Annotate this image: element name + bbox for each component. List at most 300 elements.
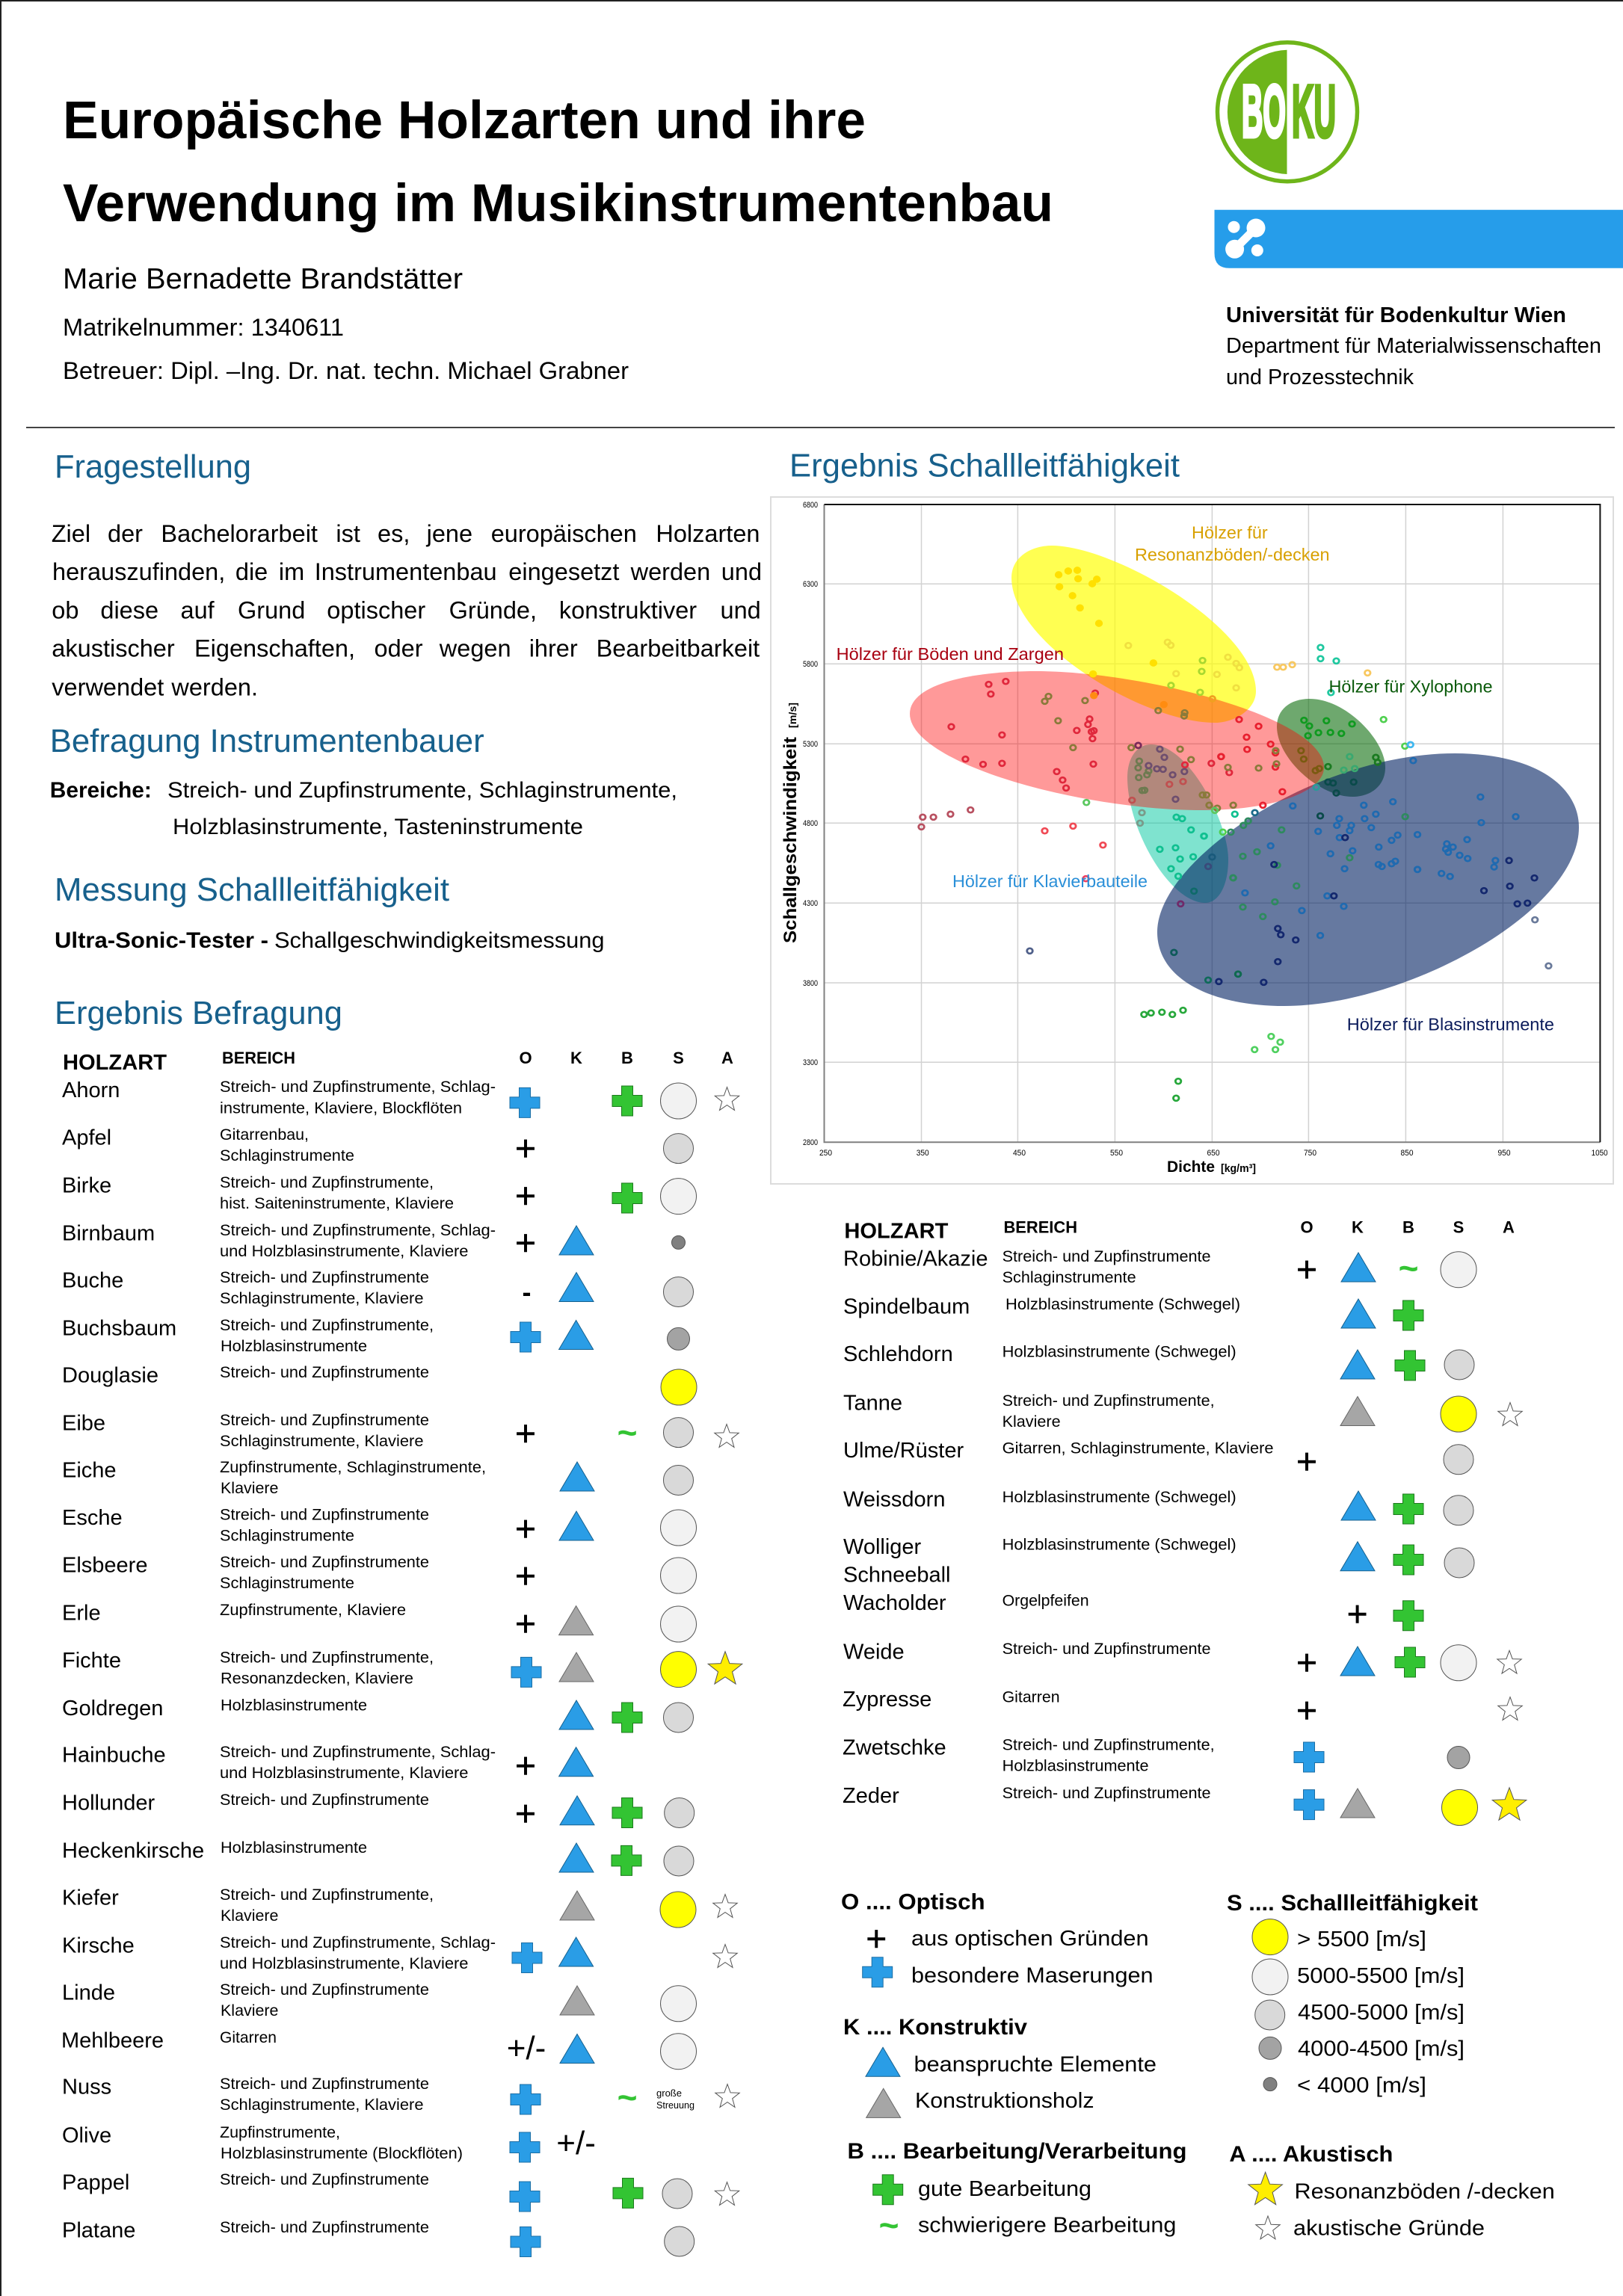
title: Europäische Holzarten und ihre: [63, 91, 866, 150]
row: Tanne: Klaviere: [1003, 1413, 1061, 1431]
legend item: schwierigere Bearbeitung: [918, 2214, 1176, 2238]
row: Weide: +: [1296, 1644, 1317, 1683]
table header: S: [1453, 1218, 1464, 1236]
icon: yellow star: [1248, 2172, 1282, 2205]
x axis tick labels: 1050: [1592, 1149, 1608, 1158]
legend heading: O .... Optisch: [841, 1889, 985, 1914]
region: Xylophone ellipse: [1277, 699, 1385, 797]
row: Birnbaum: und Holzblasinstrumente, Klaviere: [220, 1242, 468, 1260]
x axis tick labels: 450: [1013, 1149, 1026, 1158]
legend item: < 4000 [m/s]: [1297, 2074, 1426, 2098]
row: Pappel: Streich- und Zupfinstrumente: [220, 2170, 429, 2188]
row: Elsbeere: Elsbeere: [62, 1553, 147, 1577]
row: Ahorn: Ahorn: [62, 1078, 120, 1102]
row: Buchsbaum: Holzblasinstrumente: [221, 1337, 367, 1355]
table header: BEREICH: [222, 1049, 295, 1067]
row: Wacholder: Orgelpfeifen: [1003, 1592, 1089, 1610]
row: Wolliger Schneeball: [843, 1535, 1474, 1587]
heading: Befragung Instrumentenbauer: Befragung Instrumentenbauer: [50, 723, 484, 759]
legend heading: B .... Bearbeitung/Verarbeitung: [848, 2139, 1187, 2164]
row: Hainbuche: Hainbuche: [62, 1743, 166, 1767]
data points: upper right chart area: [1201, 645, 1518, 872]
heading: Ergebnis Befragung: Ergebnis Befragung: [55, 995, 342, 1031]
row: Buche: Schlaginstrumente, Klaviere: [220, 1289, 423, 1307]
icon: blue cross: [863, 1957, 893, 1987]
matriculation number: Matrikelnummer: 1340611: [63, 314, 344, 341]
legend: K Konstruktiv: [843, 2015, 1157, 2117]
row: Erle: +: [515, 1605, 536, 1644]
label: Hölzer für Resonanzböden/-decken: Hölzer für: [1192, 523, 1268, 543]
row: Zwetschke: [843, 1735, 1470, 1775]
legend item: Resonanzböden /-decken: [1295, 2179, 1555, 2203]
y axis tick labels: 3800: [803, 979, 818, 988]
row: Wacholder: Wacholder: [843, 1591, 946, 1615]
row: Kiefer: [62, 1886, 737, 1928]
table header: S: [673, 1049, 684, 1067]
row: Zeder: Streich- und Zupfinstrumente: [1003, 1784, 1211, 1802]
legend item: 4000-4500 [m/s]: [1298, 2037, 1465, 2061]
row: Heckenkirsche: [62, 1839, 694, 1876]
icon: smallest circle: [1263, 2078, 1277, 2091]
text block: research question: optischer: [327, 596, 425, 623]
legend: B Bearbeitung: [848, 2139, 1187, 2244]
row: Kirsche: Streich- und Zupfinstrumente, Schlag-: [220, 1934, 496, 1951]
legend item: gute Bearbeitung: [918, 2177, 1091, 2201]
y axis tick labels: 6800: [803, 501, 818, 510]
row: Zeder: [843, 1784, 1527, 1825]
legend heading: K .... Konstruktiv: [843, 2015, 1027, 2040]
row: Eibe: Schlaginstrumente, Klaviere: [220, 1432, 423, 1450]
row: Apfel: Schlaginstrumente: [220, 1147, 354, 1164]
legend heading: A .... Akustisch: [1229, 2142, 1393, 2167]
row: Hainbuche: [62, 1743, 594, 1786]
row: Platane: Streich- und Zupfinstrumente: [220, 2218, 429, 2236]
text block: research question: Eigenschaften,: [194, 635, 355, 662]
row: Fichte: Resonanzdecken, Klaviere: [221, 1670, 413, 1688]
label: Hölzer für Xylophone: Hölzer für Xylophone: [1329, 677, 1492, 697]
title: [63, 91, 1053, 233]
row: Weide: [843, 1640, 1521, 1683]
icon: green cross: [873, 2175, 903, 2205]
row: Erle: Zupfinstrumente, Klaviere: [220, 1601, 406, 1619]
icon: grey triangle: [866, 2088, 901, 2117]
row: Ahorn: [62, 1078, 739, 1119]
row: Platane: [62, 2218, 695, 2257]
row: Buchsbaum: Streich- und Zupfinstrumente,: [220, 1316, 434, 1334]
x axis tick labels: 550: [1110, 1149, 1123, 1158]
department: und Prozesstechnik: [1226, 365, 1414, 389]
text block: research question: konstruktiver: [559, 596, 697, 623]
row: Ahorn: Streich- und Zupfinstrumente, Schlag-: [220, 1078, 496, 1096]
row: Hainbuche: +: [515, 1747, 536, 1786]
row: Esche: Esche: [62, 1506, 123, 1530]
row: Apfel: Gitarrenbau,: [220, 1126, 309, 1144]
row: Olive: [62, 2123, 596, 2162]
text block: research question: Bearbeitbarkeit: [597, 635, 760, 662]
author: Marie Bernadette Brandstätter: [63, 263, 463, 295]
row: Elsbeere: Schlaginstrumente: [220, 1574, 354, 1592]
x axis tick labels: 350: [917, 1149, 929, 1158]
legend item: beanspruchte Elemente: [914, 2052, 1157, 2076]
text block: research question: Instrumentenbau: [315, 558, 497, 585]
row: Wolliger Schneeball: Schneeball: [843, 1564, 951, 1587]
region: Böden und Zargen ellipse: [910, 671, 1324, 810]
row: Nuss: Streich- und Zupfinstrumente: [220, 2075, 429, 2093]
row: Kirsche: Kirsche: [62, 1934, 135, 1958]
text block: research question: europäischen: [491, 520, 637, 547]
row: Ulme/Rüster: [843, 1439, 1473, 1482]
row: Buchsbaum: [62, 1316, 689, 1355]
table header: HOLZART: [63, 1051, 167, 1075]
text block: research question: akustischer: [52, 635, 175, 662]
department: [1226, 334, 1601, 389]
row: Nuss: große: [656, 2087, 682, 2099]
row: Robinie/Akazie: ~: [1399, 1249, 1418, 1288]
row: Eiche: Zupfinstrumente, Schlaginstrumente,: [220, 1458, 486, 1476]
row: Linde: [62, 1981, 697, 2022]
text block: Bereiche: [50, 778, 677, 839]
row: Hainbuche: Streich- und Zupfinstrumente, Schlag-: [220, 1743, 496, 1761]
row: Esche: +: [515, 1510, 536, 1549]
row: Birke: +: [515, 1176, 536, 1217]
table header: A: [721, 1049, 733, 1067]
row: Zypresse: [843, 1688, 1522, 1731]
region: Blasinstrumente ellipse: [1157, 753, 1579, 1006]
row: Eibe: +: [515, 1415, 536, 1454]
row: Douglasie: Douglasie: [62, 1363, 158, 1387]
label: Hölzer für Klavierbauteile: Hölzer für Klavierbauteile: [952, 871, 1148, 891]
x axis tick labels: 750: [1304, 1149, 1316, 1158]
row: Buche: Buche: [62, 1269, 123, 1293]
row: Wacholder: +: [1347, 1595, 1368, 1635]
row: Linde: Linde: [62, 1981, 115, 2005]
text block: Bereiche: Holzblasinstrumente, Tasteninstrumente: [173, 815, 583, 839]
icon: green tilde: ~: [879, 2206, 899, 2244]
row: Buche: Streich- und Zupfinstrumente: [220, 1268, 429, 1286]
row: Zypresse: Zypresse: [843, 1688, 931, 1712]
text block: research question: diese: [100, 596, 158, 623]
university name: Universität für Bodenkultur Wien: [1226, 303, 1566, 327]
row: Elsbeere: Streich- und Zupfinstrumente: [220, 1553, 429, 1571]
row: Weissdorn: [843, 1487, 1473, 1525]
row: Esche: Schlaginstrumente: [220, 1526, 354, 1544]
title: Verwendung im Musikinstrumentenbau: [63, 174, 1053, 233]
row: Nuss: Streuung: [656, 2099, 695, 2111]
row: Mehlbeere: +/-: [507, 2030, 546, 2067]
row: Erle: Erle: [62, 1601, 101, 1625]
header: title and author: [63, 91, 1053, 384]
row: Pappel: Pappel: [62, 2170, 129, 2194]
text block: research question: werden: [630, 558, 710, 585]
icon: blue triangle: [866, 2047, 900, 2076]
row: Eiche: [62, 1458, 694, 1497]
x axis title: Dichte: [1167, 1158, 1215, 1176]
row: Tanne: [843, 1392, 1522, 1432]
row: Tanne: Streich- und Zupfinstrumente,: [1003, 1392, 1215, 1410]
row: Mehlbeere: Mehlbeere: [61, 2028, 164, 2052]
row: Douglasie: Streich- und Zupfinstrumente: [220, 1363, 429, 1381]
row: Eiche: Eiche: [62, 1459, 117, 1483]
table header: B: [621, 1049, 633, 1067]
text block: research question: [52, 520, 762, 700]
legend item: besondere Maserungen: [911, 1964, 1154, 1988]
data points: lower right chart area: [1231, 867, 1551, 1052]
text block: research question: herauszufinden,: [52, 558, 225, 585]
label: Hölzer für Resonanzböden/-decken: [1135, 523, 1330, 564]
data points: lower left chart area: [1027, 854, 1241, 1101]
row: Olive: Olive: [62, 2124, 111, 2148]
legend item: akustische Gründe: [1293, 2216, 1485, 2240]
row: Linde: Streich- und Zupfinstrumente: [220, 1981, 429, 1999]
row: Hollunder: +: [515, 1794, 536, 1834]
text block: research question: ihrer: [529, 635, 578, 662]
row: Esche: [62, 1505, 697, 1549]
x axis tick labels: 950: [1498, 1149, 1510, 1158]
row: Erle: [62, 1601, 697, 1644]
row: Robinie/Akazie: Streich- und Zupfinstrumente: [1003, 1247, 1211, 1265]
chart: sound velocity vs density scatter: [771, 497, 1613, 1184]
row: Hollunder: [62, 1791, 695, 1834]
row: Olive: Zupfinstrumente,: [220, 2123, 340, 2141]
legend: S Schallleitfähigkeit: [1227, 1891, 1478, 2098]
row: Heckenkirsche: Heckenkirsche: [62, 1839, 204, 1863]
row: Kiefer: Kiefer: [62, 1886, 119, 1910]
supervisor: Betreuer: Dipl. –Ing. Dr. nat. techn. Michael Grabner: [63, 357, 629, 384]
icon: outline star: [1256, 2216, 1280, 2239]
text block: measurement method: Schallgeschwindigkeitsmessung: [274, 928, 604, 953]
legend heading: S .... Schallleitfähigkeit: [1227, 1891, 1478, 1916]
legend item: 4500-5000 [m/s]: [1298, 2001, 1465, 2025]
table header: B: [1402, 1218, 1414, 1236]
heading: Fragestellung: Fragestellung: [55, 448, 251, 485]
legend item: > 5500 [m/s]: [1297, 1928, 1426, 1951]
legend: A Akustisch: [1229, 2142, 1555, 2240]
row: Apfel: [62, 1126, 694, 1169]
row: Elsbeere: +: [515, 1557, 536, 1596]
department: Department für Materialwissenschaften: [1226, 334, 1601, 358]
row: Mehlbeere: Gitarren: [220, 2028, 277, 2046]
text block: research question: es,: [378, 520, 410, 547]
text block: research question: Bachelorarbeit: [161, 520, 318, 547]
table: left wood species: [61, 1049, 742, 2257]
row: Fichte: [62, 1649, 742, 1688]
row: Zypresse: Gitarren: [1003, 1688, 1060, 1706]
row: Nuss: [62, 2075, 739, 2117]
icon: grey circle: [1255, 2000, 1285, 2030]
row: Buchsbaum: Buchsbaum: [62, 1317, 176, 1341]
text block: measurement method: Ultra-Sonic-Tester -: [55, 928, 268, 953]
row: Platane: Platane: [62, 2218, 135, 2242]
y axis tick labels: 3300: [803, 1058, 818, 1067]
icon: black plus: +: [866, 1920, 887, 1960]
row: Goldregen: Goldregen: [62, 1697, 163, 1721]
data points: upper left chart area: [919, 567, 1242, 871]
text block: measurement method: [55, 928, 604, 953]
logo: BOKU: [1217, 43, 1358, 182]
row: Apfel: Apfel: [62, 1126, 111, 1149]
region: Resonanzböden ellipse: [1011, 546, 1256, 723]
y axis tick labels: 2800: [803, 1138, 818, 1147]
row: Zypresse: +: [1296, 1691, 1317, 1731]
row: Eibe: Streich- und Zupfinstrumente: [220, 1411, 429, 1429]
row: Weissdorn: Weissdorn: [843, 1487, 945, 1511]
heading: Messung Schallleitfähigkeit: Messung Schallleitfähigkeit: [55, 871, 449, 908]
row: Wolliger Schneeball: Wolliger: [843, 1535, 922, 1559]
row: Pappel: [62, 2170, 739, 2212]
row: Hollunder: Hollunder: [62, 1791, 155, 1815]
x axis tick labels: [819, 1149, 1608, 1158]
row: Elsbeere: [62, 1553, 697, 1596]
row: Birke: hist. Saiteninstrumente, Klaviere: [220, 1194, 454, 1212]
row: Nuss: ~: [618, 2078, 637, 2117]
row: Birnbaum: Streich- und Zupfinstrumente, Schlag-: [220, 1221, 496, 1239]
table header: K: [570, 1049, 582, 1067]
row: Zeder: Zeder: [843, 1784, 899, 1808]
row: Fichte: Streich- und Zupfinstrumente,: [220, 1649, 434, 1667]
text block: research question: und: [721, 596, 761, 623]
table header: O: [519, 1049, 532, 1067]
row: Nuss: Schlaginstrumente, Klaviere: [220, 2096, 423, 2114]
icon: small grey circle: [1259, 2037, 1281, 2059]
row: Spindelbaum: Holzblasinstrumente (Schwegel): [1005, 1295, 1240, 1313]
logo: BOKU: BO: [1242, 70, 1286, 152]
row: Eibe: ~: [618, 1413, 637, 1452]
row: Robinie/Akazie: Robinie/Akazie: [843, 1247, 988, 1271]
row: Ulme/Rüster: Ulme/Rüster: [843, 1439, 964, 1463]
row: Robinie/Akazie: Schlaginstrumente: [1003, 1268, 1136, 1286]
x axis tick labels: 850: [1401, 1149, 1413, 1158]
text block: research question: ob: [52, 596, 78, 623]
table header: A: [1503, 1218, 1515, 1236]
text block: Bereiche: Streich- und Zupfinstrumente, Schlaginstrumente,: [167, 778, 677, 803]
table header: HOLZART: [844, 1220, 949, 1244]
row: Mehlbeere: [61, 2028, 697, 2070]
text block: research question: jene: [426, 520, 472, 547]
heading: Ergebnis Schallleitfähigkeit: Ergebnis Schallleitfähigkeit: [789, 447, 1180, 484]
row: Kirsche: und Holzblasinstrumente, Klaviere: [220, 1954, 468, 1972]
icon: light circle: [1252, 1959, 1288, 1995]
row: Schlehdorn: Holzblasinstrumente (Schwegel): [1003, 1343, 1237, 1361]
blue banner with network icon: [1214, 210, 1623, 268]
legend item: Konstruktionsholz: [915, 2089, 1094, 2113]
row: Heckenkirsche: Holzblasinstrumente: [221, 1839, 367, 1857]
text block: research question: auf: [181, 596, 215, 623]
text block: research question: Holzarten: [656, 520, 760, 547]
row: Wolliger Schneeball: Holzblasinstrumente (Schwegel): [1003, 1535, 1237, 1553]
row: Eiche: Klaviere: [221, 1479, 278, 1497]
row: Kiefer: Streich- und Zupfinstrumente,: [220, 1886, 434, 1904]
table: right wood species: [843, 1218, 1527, 1825]
y axis tick labels: 5800: [803, 660, 818, 669]
row: Kiefer: Klaviere: [221, 1907, 278, 1925]
row: Zwetschke: Streich- und Zupfinstrumente,: [1003, 1736, 1215, 1754]
text block: research question: eingesetzt: [508, 558, 619, 585]
row: Birke: Birke: [62, 1173, 111, 1197]
text block: research question: und: [721, 558, 762, 585]
y axis title: [m/s]: [786, 703, 798, 728]
row: Goldregen: Holzblasinstrumente: [221, 1697, 367, 1715]
row: Spindelbaum: [843, 1294, 1423, 1330]
row: Buche: -: [522, 1277, 531, 1307]
row: Wacholder: [843, 1591, 1423, 1635]
table header: BEREICH: [1003, 1218, 1077, 1236]
label: Hölzer für Resonanzböden/-decken: Resonanzböden/-decken: [1135, 545, 1330, 564]
text block: research question: im: [279, 558, 304, 585]
y axis tick labels: 5300: [803, 740, 818, 749]
row: Ulme/Rüster: +: [1296, 1442, 1317, 1482]
row: Linde: Klaviere: [221, 2002, 278, 2019]
row: Schlehdorn: Schlehdorn: [843, 1342, 953, 1366]
row: Buche: [62, 1268, 694, 1307]
row: Apfel: +: [515, 1129, 536, 1169]
row: Douglasie: [62, 1363, 697, 1405]
table header: [63, 1049, 733, 1075]
legend item: 5000-5500 [m/s]: [1297, 1964, 1465, 1988]
text block: research question: wegen: [439, 635, 511, 662]
legend: O Optisch: [841, 1889, 1154, 1988]
text block: research question: verwendet: [52, 673, 164, 700]
table header: O: [1300, 1218, 1314, 1236]
row: Birnbaum: [62, 1221, 685, 1263]
label: Hölzer für Blasinstrumente: Hölzer für Blasinstrumente: [1347, 1015, 1554, 1034]
table header: K: [1352, 1218, 1364, 1236]
icon: yellow circle: [1252, 1919, 1288, 1955]
row: Robinie/Akazie: +: [1296, 1250, 1317, 1290]
logo: BOKU: KU: [1292, 70, 1336, 152]
row: Weide: Streich- und Zupfinstrumente: [1003, 1640, 1211, 1658]
text block: research question: die: [235, 558, 268, 585]
y axis tick labels: 4800: [803, 819, 818, 828]
row: Hollunder: Streich- und Zupfinstrumente: [220, 1791, 429, 1809]
text block: research question: werden.: [170, 673, 258, 700]
x axis title: [1167, 1158, 1256, 1176]
row: Birke: [62, 1173, 697, 1217]
legend item: aus optischen Gründen: [911, 1927, 1149, 1951]
row: Weissdorn: Holzblasinstrumente (Schwegel): [1003, 1488, 1237, 1506]
text block: research question: oder: [374, 635, 423, 662]
label: Hölzer für Böden und Zargen: Hölzer für Böden und Zargen: [837, 644, 1064, 664]
row: Weide: Weide: [843, 1640, 905, 1664]
row: Eibe: Eibe: [62, 1411, 105, 1435]
row: Ulme/Rüster: Gitarren, Schlaginstrumente, Klaviere: [1003, 1439, 1274, 1457]
row: Tanne: Tanne: [843, 1392, 902, 1416]
row: Olive: +/-: [556, 2125, 596, 2161]
row: Fichte: Fichte: [62, 1649, 121, 1673]
row: Birke: Streich- und Zupfinstrumente,: [220, 1173, 434, 1191]
text block: research question: Grund: [238, 596, 305, 623]
row: Olive: Holzblasinstrumente (Blockflöten): [221, 2144, 463, 2162]
table header: [844, 1218, 1515, 1244]
y axis tick labels: 6300: [803, 580, 818, 589]
y axis tick labels: [803, 501, 818, 1147]
y axis tick labels: 4300: [803, 899, 818, 908]
text block: research question: Ziel: [52, 520, 90, 547]
row: Hainbuche: und Holzblasinstrumente, Klaviere: [220, 1764, 468, 1782]
university: [1226, 303, 1601, 389]
row: Zwetschke: Holzblasinstrumente: [1003, 1757, 1149, 1775]
row: Birnbaum: +: [515, 1223, 536, 1263]
row: Nuss: Nuss: [62, 2075, 111, 2099]
row: Kirsche: [62, 1934, 737, 1973]
x axis tick labels: 250: [819, 1149, 832, 1158]
row: Ahorn: instrumente, Klaviere, Blockflöten: [220, 1099, 462, 1117]
x axis tick labels: 650: [1207, 1149, 1220, 1158]
text block: research question: Gründe,: [449, 596, 537, 623]
text block: research question: ist: [336, 520, 360, 547]
row: Esche: Streich- und Zupfinstrumente: [220, 1505, 429, 1523]
text block: Bereiche: Bereiche:: [50, 778, 152, 803]
row: Eibe: [62, 1411, 739, 1454]
